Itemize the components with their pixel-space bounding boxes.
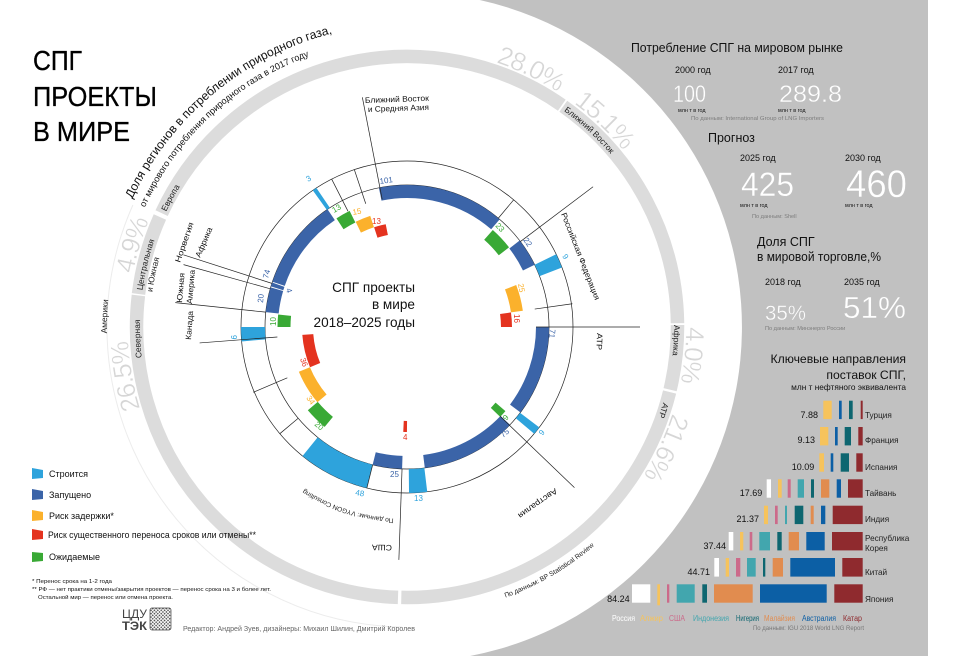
credits: Редактор: Андрей Зуев, дизайнеры: Михаил Шилин, Дмитрий Королев (183, 625, 415, 633)
row Индия (736, 506, 889, 524)
row Франция: Франция (865, 436, 899, 445)
row Тайвань: 17.69 (740, 488, 762, 498)
row Индия: Индия (865, 515, 889, 524)
row Турция: 7.88 (800, 410, 818, 420)
value 20 blue: 20 (256, 293, 266, 303)
year 2018 (765, 277, 806, 325)
percent Америка: 26.5% (111, 342, 140, 411)
heading: LNG share: в мировой торговле,% (757, 250, 881, 264)
value 13 green: 13 (330, 202, 343, 215)
arc 15 (358, 222, 372, 227)
gray right panel with circular cutout (470, 0, 928, 656)
value 23: 23 (494, 221, 507, 234)
center label (314, 280, 415, 330)
label Африка: Африка (672, 325, 680, 356)
year 2025: млн т в год (740, 203, 768, 209)
title: ПРОЕКТЫ (33, 81, 157, 112)
label Африка: Африка (194, 225, 215, 259)
legend item: Строится: Строится (49, 469, 88, 479)
legend item: Ожидаемые: Ожидаемые (49, 552, 100, 562)
radial grid circles (241, 161, 573, 493)
legend: supplier countries: Нигерия (736, 614, 759, 623)
label США: США (371, 543, 392, 552)
outer gray ring with regions (137, 56, 678, 597)
arc 74 (279, 215, 331, 284)
faint outer arc (107, 205, 402, 627)
row Испания: 10.09 (792, 462, 814, 472)
row Турция (800, 401, 892, 420)
value 25 blue: 25 (390, 470, 399, 479)
value 101: 101 (379, 175, 394, 186)
arc 71 (515, 327, 542, 408)
year 2025 (740, 153, 794, 209)
arc 13 red (376, 230, 387, 232)
panel: consumption (631, 41, 843, 122)
legend: supplier countries (612, 614, 863, 623)
value 75: 75 (499, 427, 512, 440)
row Китай (687, 558, 887, 577)
heading: LNG share (757, 235, 881, 264)
legend item: Запущено: Запущено (49, 490, 91, 500)
arc 20 (272, 289, 277, 313)
legend: project status (32, 468, 256, 562)
percent Центральная и Южная: 4.9% (118, 218, 148, 272)
value 9 left: 9 (229, 335, 238, 340)
year 2017: 289.8 (779, 81, 842, 108)
row Тайвань (740, 479, 896, 498)
label Центральная: Центральная (136, 239, 154, 290)
year 2017: 2017 год (778, 65, 814, 75)
value 9: 9 (560, 252, 571, 261)
row Республика Корея: Республика (865, 534, 910, 543)
footnotes: Остальной мир — перенос или отмена проекта. (38, 594, 173, 601)
label Америки: Америки (101, 300, 109, 334)
legend: supplier countries: Малайзия (764, 614, 795, 623)
label Норвегия: Норвегия (173, 221, 196, 264)
label АТР: АТР (660, 402, 668, 418)
legend item: Риск задержки: Риск задержки* (49, 511, 114, 521)
legend: supplier countries: Алжир (640, 614, 664, 623)
title: В МИРЕ (33, 116, 130, 147)
panel: LNG share (757, 235, 906, 332)
label Российская Федерация: Российская Федерация (559, 211, 602, 301)
value 20 green: 20 (313, 420, 326, 433)
arc 20 green (313, 406, 329, 422)
label Северная: Северная (136, 320, 142, 358)
value 74: 74 (261, 268, 272, 280)
arc 13 (409, 480, 426, 481)
row Испания: Испания (865, 463, 898, 472)
row Китай: 44.71 (687, 567, 710, 577)
project segments: риск задержки (304, 222, 517, 398)
value 15: 15 (352, 206, 363, 217)
value 71: 71 (547, 329, 557, 339)
arc 10 (278, 315, 291, 327)
center label: СПГ проекты (332, 280, 415, 295)
value 13: 13 (414, 494, 423, 503)
legend item: Строится (32, 468, 88, 479)
source: IGU: По данным: IGU 2018 World LNG Report (753, 626, 864, 632)
year 2000: млн т в год (678, 108, 706, 114)
title: СПГ (33, 45, 82, 76)
row Турция: Турция (865, 411, 892, 420)
row Индия: 21.37 (736, 514, 759, 524)
value 4 blue: 4 (284, 287, 294, 294)
source: По данным: Shell (752, 214, 797, 220)
center label: в мире (372, 297, 415, 312)
source VYGON: По данным: VYGON Consulting (302, 488, 394, 524)
year 2030: млн т в год (845, 203, 873, 209)
arc 75 (424, 420, 505, 461)
legend: supplier countries: США (669, 614, 686, 623)
row Япония: Япония (865, 595, 893, 604)
label Южная Америка: Южная (175, 273, 187, 303)
footnotes: ** РФ — нет практики отмены/закрытия проектов — перенос срока на 3 и более лет. (32, 587, 271, 593)
value 6 green: 6 (500, 413, 510, 422)
curved subheading: от мирового потребления природного газа в 2017 году (141, 52, 308, 207)
value 3: 3 (304, 173, 313, 184)
percent АТР: 21.6% (645, 414, 688, 480)
year 2018: 2018 год (765, 277, 801, 287)
ring segment: Африка (670, 325, 678, 390)
center label: 2018–2025 годы (314, 315, 415, 330)
arc 16 (506, 313, 507, 327)
percent Африка: 4.0% (682, 328, 704, 382)
label Южная Америка (175, 269, 197, 304)
label и Южная: и Южная (148, 257, 160, 292)
year 2030: 460 (846, 163, 907, 206)
source: По данным: International Group of LNG Importers (691, 116, 824, 122)
logo: ЦДУ ТЭК: ТЭК (122, 621, 148, 633)
value 25 yellow: 25 (516, 283, 527, 294)
value 36: 36 (298, 357, 310, 369)
label Южная Америка: Америка (185, 269, 197, 304)
arc 6 green (496, 407, 500, 412)
arc 3 (320, 198, 323, 200)
logo: ЦДУ ТЭК (122, 608, 171, 633)
year 2025: 425 (741, 166, 794, 204)
project segments: запущено (272, 192, 542, 462)
segment value labels (229, 173, 571, 503)
legend: supplier countries: Катар (843, 614, 863, 623)
percent Европа: 28.0% (498, 48, 563, 90)
row Китай: Китай (865, 568, 887, 577)
arc 25 (374, 458, 402, 462)
value 13 red: 13 (372, 217, 381, 226)
year 2035: 51% (843, 290, 906, 325)
year 2000: 2000 год (675, 65, 711, 75)
value 4: 4 (403, 433, 408, 442)
percent Ближний Восток: 15.1% (576, 93, 634, 148)
project segments: риск отмены (308, 230, 506, 426)
label Австралия: Австралия (516, 486, 559, 520)
row Тайвань: Тайвань (865, 489, 896, 498)
label Европа: Европа (161, 185, 180, 212)
label Ближний Восток и Средняя Азия (365, 94, 430, 114)
year 2000 (673, 65, 711, 114)
panel: key routes heading: поставок СПГ, (826, 368, 906, 382)
arc 25 yellow (511, 287, 517, 312)
year 2018: 35% (765, 302, 806, 325)
panel: key routes heading: Ключевые направления (770, 352, 906, 366)
arc 13 green (340, 217, 352, 224)
project segments: ожидаемые (284, 217, 504, 422)
label Ближний Восток и Средняя Азия: Ближний Восток (365, 94, 430, 105)
arc 22 (514, 244, 529, 268)
project segments: строится (253, 198, 551, 481)
logo: ЦДУ ТЭК: ЦДУ (122, 609, 148, 621)
value 48: 48 (355, 488, 366, 499)
ring segment: Европа (162, 56, 562, 213)
panel: key routes heading (770, 352, 906, 392)
region labels around chart (173, 94, 604, 552)
panel: forecast (708, 131, 907, 220)
year 2017: млн т в год (778, 108, 806, 114)
value 6 blue: 6 (536, 428, 546, 437)
value 22: 22 (521, 236, 534, 249)
ring segment: Центральная и Южная Америка (138, 217, 160, 294)
year 2030: 2030 год (845, 153, 881, 163)
source BP: По данным: BP Statistical Review (504, 543, 594, 598)
arc 4 red (404, 421, 407, 432)
panel: key routes heading: млн т нефтяного эквивалента (791, 382, 906, 392)
year 2035: 2035 год (844, 277, 880, 287)
row Испания (792, 453, 898, 472)
row Республика Корея (703, 532, 910, 553)
heading: forecast: Прогноз (708, 131, 755, 145)
row Республика Корея: 37.44 (703, 541, 726, 551)
row Япония (607, 584, 893, 605)
footnotes (32, 579, 271, 601)
value 16: 16 (512, 314, 521, 323)
ring labels (101, 106, 680, 460)
arc 9 right (545, 260, 551, 272)
ring segment: Северная Америка (137, 295, 398, 597)
arc 4 (277, 285, 278, 288)
ring segment: АТР (401, 392, 670, 597)
label Ближний Восток: Ближний Восток (564, 106, 614, 154)
arc 34 (304, 370, 322, 398)
label Ближний Восток и Средняя Азия: и Средняя Азия (368, 103, 429, 114)
value 10: 10 (269, 317, 278, 326)
legend: supplier countries: Австралия (802, 614, 836, 623)
arc 9 left (241, 327, 266, 340)
row Франция: 9.13 (797, 435, 815, 445)
arc 6 (525, 420, 530, 426)
legend: supplier countries: Индонезия (693, 614, 729, 623)
legend item: Запущено (32, 489, 91, 500)
radial divider lines (175, 97, 640, 560)
row Япония: 84.24 (607, 594, 630, 604)
bar chart: supply routes (607, 401, 910, 605)
row Республика Корея: Корея (865, 544, 888, 553)
value 34: 34 (304, 394, 317, 407)
source: По данным: Минэнерго России (765, 326, 845, 332)
arc 36 (308, 334, 315, 365)
year 2017 (778, 65, 842, 114)
ring segment: Ближний Восток (563, 106, 678, 323)
ring percentages (111, 48, 704, 494)
year 2025: 2025 год (740, 153, 776, 163)
heading: LNG share: Доля СПГ (757, 235, 815, 249)
label АТР: АТР (594, 333, 604, 350)
footnotes: * Перенос срока на 1-2 года (32, 579, 113, 585)
label Канада: Канада (184, 310, 195, 340)
heading: consumption: Потребление СПГ на мировом рынке (631, 41, 843, 55)
row Франция (797, 427, 899, 445)
year 2000: 100 (673, 81, 706, 108)
arc 48 (310, 447, 370, 476)
title (33, 45, 157, 147)
legend: supplier countries: Россия (612, 614, 635, 623)
curved heading: regional share: Доля регионов в потреблении природного газа, (126, 28, 332, 200)
legend item: Риск переноса: Риск существенного переноса сроков или отмены** (48, 530, 256, 540)
arc 23 (488, 235, 504, 251)
arc 101 (380, 192, 495, 224)
